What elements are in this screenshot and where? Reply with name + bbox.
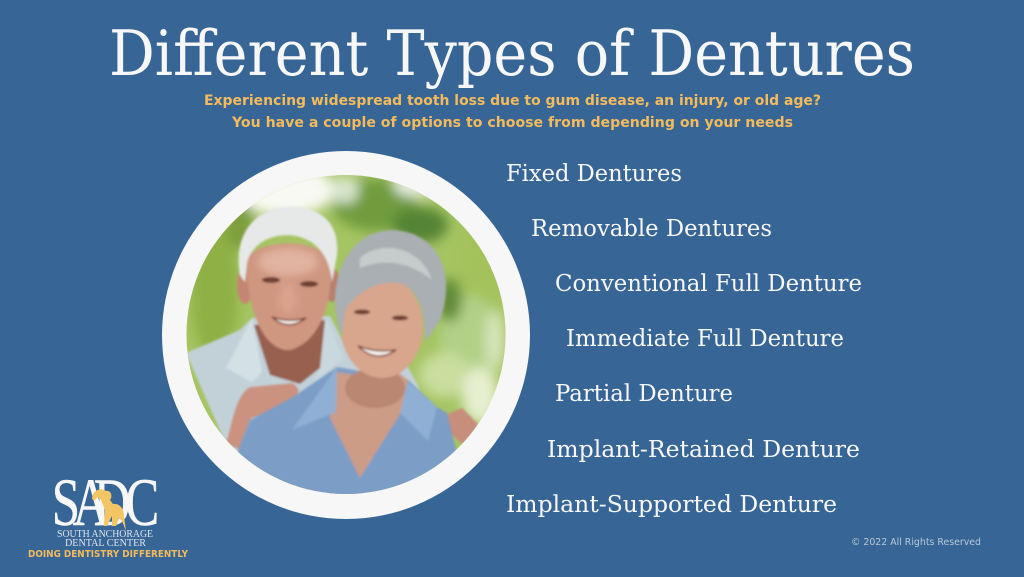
icon: ram: [92, 489, 126, 531]
item: partial denture: Partial Denture: [555, 381, 733, 407]
man collar: [226, 318, 262, 382]
logo monogram: SADC: [52, 465, 159, 541]
man eyes and smile: [262, 277, 280, 283]
man: [186, 207, 478, 460]
photo frame ring: [162, 151, 530, 519]
man hair: [239, 207, 337, 282]
subtitle: Experiencing widespread tooth loss due to gum disease, an injury, or old age?: [204, 93, 821, 109]
logo name: [57, 529, 153, 549]
item: conventional full denture: Conventional Full Denture: [555, 271, 862, 297]
item: fixed dentures: Fixed Dentures: [506, 161, 682, 187]
item: removable dentures: Removable Dentures: [531, 216, 772, 242]
man right hand: [443, 408, 478, 446]
subtitle: You have a couple of options to choose from depending on your needs: [231, 115, 793, 131]
man ears: [237, 266, 253, 304]
panel: circular photo of smiling couple: [162, 151, 530, 519]
item: immediate full denture: Immediate Full Denture: [566, 326, 844, 352]
man shirt: [186, 316, 425, 460]
man left hand: [226, 383, 299, 450]
logo tagline: DOING DENTISTRY DIFFERENTLY: [28, 549, 188, 560]
woman eyes and smile: [354, 310, 370, 314]
subtitle: [204, 93, 821, 131]
item: implant-supported denture: Implant-Supported Denture: [506, 492, 837, 518]
list of denture types: [506, 161, 862, 518]
copyright: © 2022 All Rights Reserved: [851, 537, 981, 548]
woman collar right: [400, 382, 437, 441]
woman chest: [330, 370, 408, 478]
woman hair: [335, 230, 446, 342]
woman collar left: [292, 367, 337, 430]
man neck: [254, 320, 325, 384]
woman neck: [345, 368, 405, 408]
logo: [28, 465, 188, 560]
logo name: SOUTH ANCHORAGE: [57, 529, 153, 540]
man face: [247, 243, 331, 350]
woman: [238, 230, 456, 510]
item: implant-retained denture: Implant-Retained Denture: [547, 437, 860, 463]
title: Different Types of Dentures: [109, 17, 915, 90]
woman face: [341, 276, 423, 378]
photo: [186, 175, 506, 494]
woman shirt: [238, 367, 456, 510]
logo name: DENTAL CENTER: [65, 538, 146, 549]
